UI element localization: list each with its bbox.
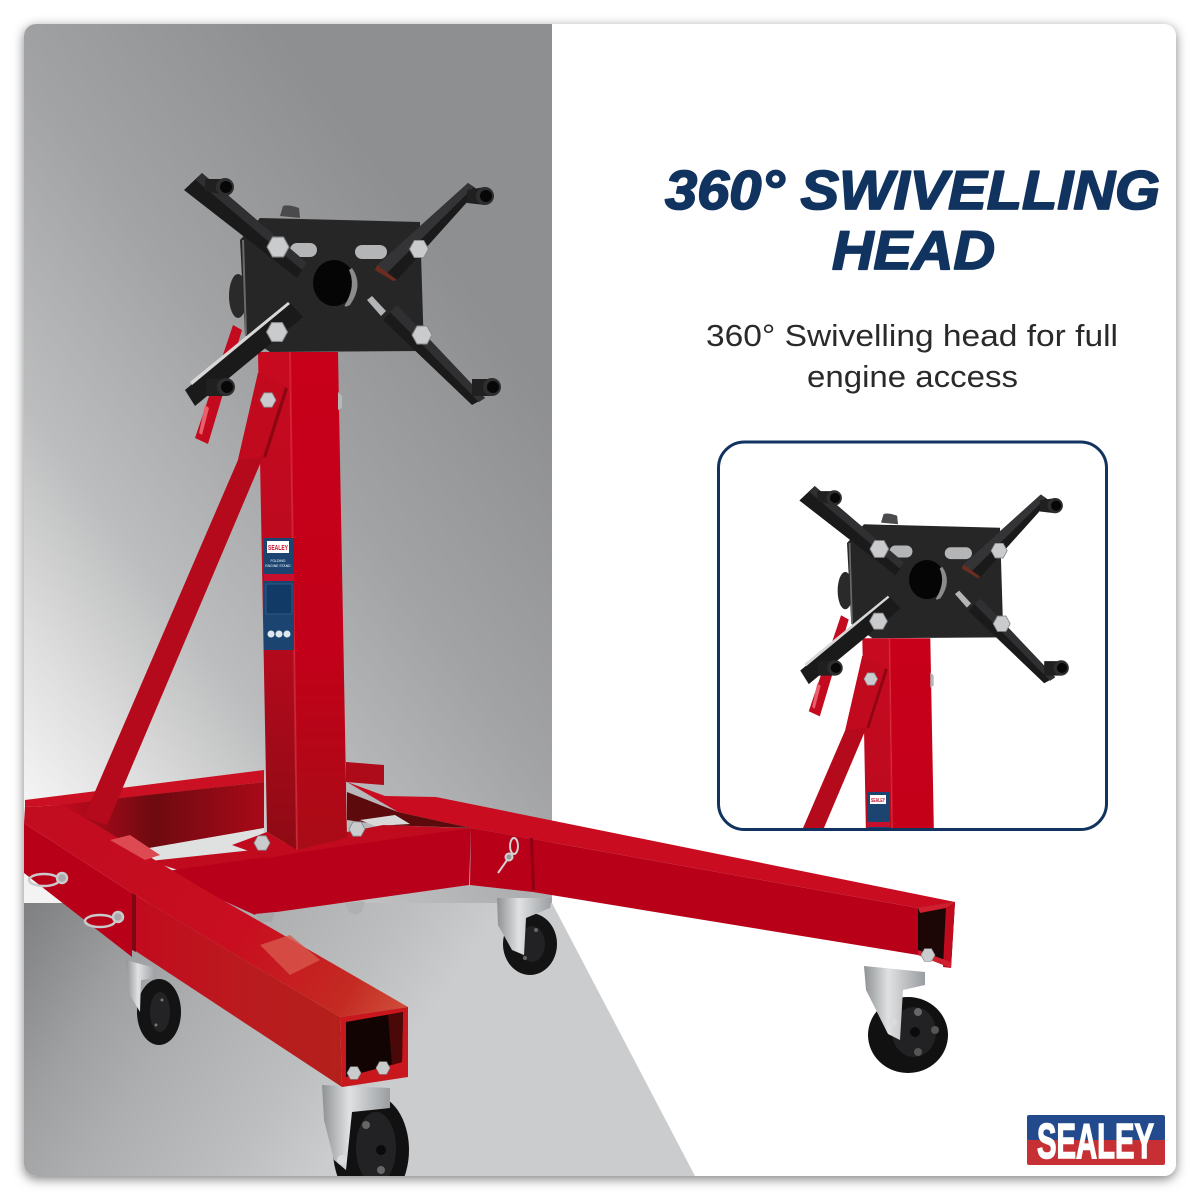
title — [665, 159, 1160, 281]
base plate with bolts — [232, 821, 366, 858]
close-up stand — [717, 440, 1108, 831]
description text — [706, 318, 1118, 394]
inset frame — [718, 442, 1106, 830]
base: under-frame bolts — [255, 901, 365, 922]
base: right leg — [347, 782, 955, 968]
label on upright: FOLDING — [270, 559, 286, 563]
base: front crossbar — [138, 792, 471, 915]
close-up label: SEALEY — [871, 798, 885, 804]
close-up label — [867, 792, 890, 832]
grey wall backdrop — [24, 24, 552, 903]
split pin — [498, 838, 518, 873]
lock pin: lower ring — [85, 912, 123, 927]
caster: front left — [126, 960, 181, 1045]
base: back bar — [25, 770, 264, 850]
title: HEAD — [832, 219, 995, 281]
base: back stub right — [346, 762, 384, 785]
label on upright — [264, 538, 294, 650]
caster: front right — [864, 966, 948, 1073]
grey floor — [24, 903, 695, 1176]
label on upright: ENGINE STAND — [265, 564, 291, 568]
caster: front centre — [322, 1085, 409, 1176]
inset: close-up of swivel head — [717, 440, 1108, 831]
base: left leg — [24, 805, 408, 1087]
description text: engine access — [807, 359, 1018, 394]
title: 360° SWIVELLING — [665, 159, 1160, 221]
description text: 360° Swivelling head for full — [706, 318, 1118, 353]
caster: rear right — [497, 898, 557, 975]
label on upright: SEALEY — [268, 545, 288, 552]
stand upright, brace and swivel head — [24, 173, 955, 1200]
lock pin: upper ring — [29, 873, 67, 886]
